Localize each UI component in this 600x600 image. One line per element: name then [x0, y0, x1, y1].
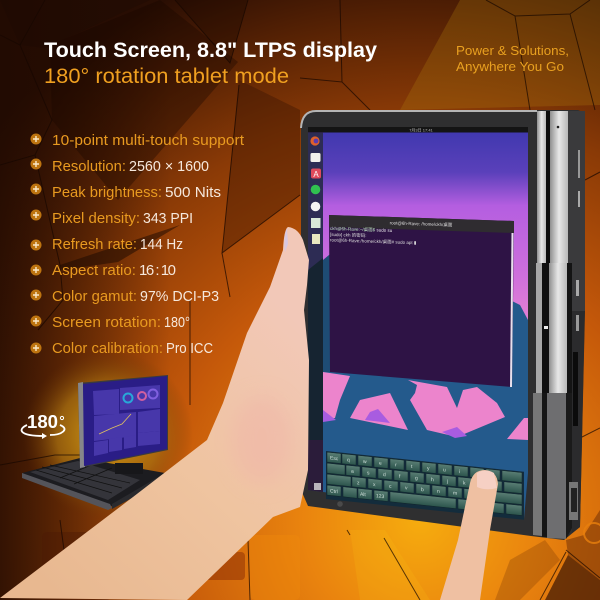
- on-screen keyboard: x: [373, 482, 376, 488]
- 180 degree rotation badge: [22, 411, 65, 439]
- on-screen keyboard: [326, 451, 524, 520]
- title: [44, 38, 377, 88]
- spec: gamut: Color gamut:: [52, 288, 137, 305]
- device body: [301, 110, 585, 540]
- hinge and right edge: [533, 111, 585, 539]
- spec: aspect: Aspect ratio:: [52, 262, 136, 279]
- on-screen keyboard: t: [411, 464, 413, 470]
- spec: resolution: [30, 158, 209, 175]
- spec: gamut: 97% DCI-P3: [140, 288, 219, 305]
- on-screen keyboard: f: [399, 474, 401, 480]
- spec: multi-touch: 10-point multi-touch support: [52, 132, 245, 149]
- on-screen keyboard: i: [459, 469, 460, 475]
- spec: gamut: [30, 288, 219, 305]
- spec: brightness: 500 Nits: [165, 184, 221, 201]
- on-screen keyboard: j: [446, 479, 448, 485]
- spec: refresh: Refresh rate:: [52, 236, 137, 253]
- spec: brightness: Peak brightness:: [52, 184, 162, 201]
- on-screen keyboard: z: [357, 480, 360, 487]
- terminal window: root@6h-Rave:/home/ckh/桌面# sudo apt ▮: [330, 236, 417, 246]
- dock: [308, 132, 323, 270]
- spec: rotation: [30, 314, 190, 331]
- tagline: Power & Solutions,: [456, 43, 569, 58]
- on-screen keyboard: Ctrl: [330, 488, 338, 495]
- tablet device: [301, 110, 585, 540]
- spec list: [30, 132, 245, 357]
- on-screen keyboard: s: [367, 470, 370, 477]
- on-screen keyboard: b: [421, 487, 424, 493]
- top bar: [308, 127, 528, 132]
- on-screen keyboard: q: [347, 457, 350, 464]
- spec: refresh: [30, 236, 183, 253]
- tagline: [456, 43, 569, 74]
- spec: resolution: 2560 × 1600: [129, 158, 209, 175]
- spec: calibration: [30, 340, 213, 357]
- home button: [337, 501, 343, 507]
- on-screen keyboard: d: [383, 472, 386, 478]
- on-screen keyboard: 123: [376, 493, 385, 500]
- spec: density: 343 PPI: [143, 210, 193, 227]
- on-screen keyboard: Alt: [360, 492, 366, 498]
- hand with thumb: [0, 227, 309, 600]
- small laptop image: [22, 375, 168, 510]
- on-screen keyboard: n: [437, 489, 440, 495]
- spec: aspect: 16 : 10: [139, 262, 176, 279]
- title: Touch Screen, 8.8" LTPS display: [44, 38, 377, 62]
- screen: 7月3日 17:41: [409, 128, 434, 132]
- on-screen keyboard: w: [363, 459, 367, 465]
- spec: refresh: 144 Hz: [140, 236, 183, 253]
- spec: density: Pixel density:: [52, 210, 140, 227]
- on-screen keyboard: r: [395, 462, 397, 468]
- on-screen keyboard: c: [389, 484, 392, 490]
- on-screen keyboard: h: [431, 477, 434, 483]
- spec: density: [30, 210, 193, 227]
- laptop screen: [78, 375, 168, 468]
- spec: aspect: [30, 262, 176, 279]
- on-screen keyboard: u: [443, 467, 446, 474]
- on-screen keyboard: a: [351, 469, 354, 475]
- title: 180° rotation tablet mode: [44, 65, 289, 88]
- spec: calibration: Pro ICC: [166, 340, 213, 357]
- tagline: Anywhere You Go: [456, 59, 564, 74]
- spec: rotation: 180°: [164, 314, 190, 331]
- wallpaper hills: [323, 372, 528, 440]
- on-screen keyboard: y: [427, 466, 430, 472]
- spec: brightness: [30, 184, 221, 201]
- on-screen keyboard: Esc: [330, 455, 339, 462]
- 180 degree rotation badge: 180: [27, 411, 58, 432]
- keyboard icon: [314, 483, 321, 490]
- spec: rotation: Screen rotation:: [52, 314, 161, 331]
- on-screen keyboard: e: [379, 461, 382, 467]
- index finger: [440, 470, 498, 600]
- screen: [308, 127, 528, 522]
- on-screen keyboard: v: [405, 485, 408, 492]
- terminal window: [sudo] ckh 的密码:: [330, 231, 367, 239]
- on-screen keyboard: g: [415, 475, 418, 482]
- on-screen keyboard: k: [463, 480, 466, 487]
- terminal window: root@6h-Rave: /home/ckh/桌面: [390, 219, 453, 228]
- watermark registered mark: [584, 523, 600, 543]
- spec: calibration: Color calibration:: [52, 340, 163, 357]
- terminal window: [329, 215, 514, 387]
- screen: A: [313, 170, 319, 179]
- spec: resolution: Resolution:: [52, 158, 126, 175]
- on-screen keyboard: m: [453, 490, 457, 497]
- terminal window: ckh@6h-Rave:~/桌面$ sudo su: [330, 225, 393, 234]
